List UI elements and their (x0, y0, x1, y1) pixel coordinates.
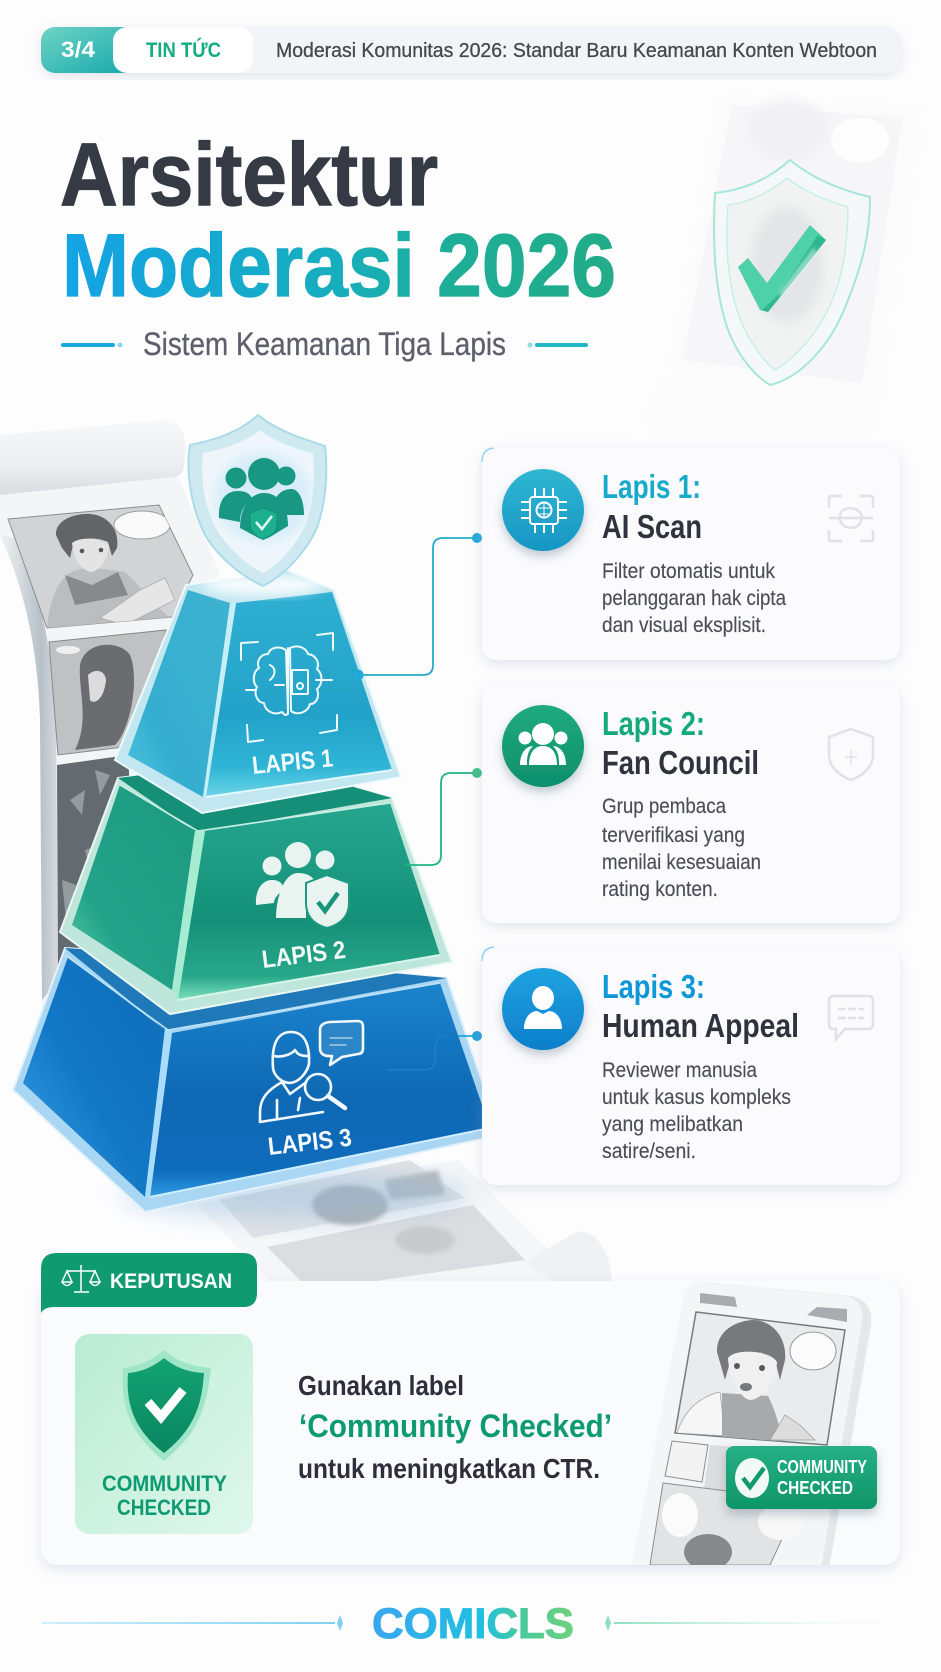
roll (0, 420, 185, 495)
card 1 description: Filter otomatis untuk (602, 560, 775, 583)
tab: keputusan: KEPUTUSAN (110, 1270, 232, 1293)
check mark (738, 225, 826, 312)
illustration: ghost comic strip with glass shield (640, 96, 925, 432)
community checked badge: CHECKED (777, 1478, 853, 1498)
connector: layer 3 to card 3 (458, 1031, 482, 1041)
card 2 description: terverifikasi yang (602, 824, 745, 847)
card: Lapis 2 Fan Council (482, 684, 900, 923)
icon: people with check badge (219, 458, 304, 540)
subtitle with rules: Sistem Keamanan Tiga Lapis (143, 326, 506, 362)
top news bar (41, 27, 900, 73)
icon: people (502, 705, 584, 787)
connector: layer 1 to card 1 (352, 533, 482, 680)
comic scroll behind pyramid (0, 420, 612, 1290)
community checked badge: COMMUNITY (777, 1457, 867, 1477)
bar headline: Moderasi Komunitas 2026: Standar Baru Keamanan Konten Webtoon (276, 40, 877, 62)
card 3 description: Reviewer manusia (602, 1059, 757, 1082)
verdict message: Gunakan label (298, 1370, 464, 1401)
layer 2: fan council (60, 760, 452, 1014)
footer brand (42, 1600, 900, 1648)
lower strip (197, 1160, 612, 1290)
layer 1 label: LAPIS 1 (251, 744, 334, 780)
card 2 name: Fan Council (602, 744, 759, 781)
card 2 description (602, 795, 761, 901)
page counter 3/4 (41, 27, 130, 73)
badge card: community checked (75, 1334, 253, 1534)
icon: chip (502, 469, 584, 551)
verdict message (298, 1370, 612, 1484)
logo: COMICLS (372, 1600, 574, 1648)
comic panel: boy (8, 505, 193, 628)
card 3 description: untuk kasus kompleks (602, 1086, 791, 1109)
icon: green shield (123, 1350, 211, 1461)
card 2 description: Grup pembaca (602, 795, 726, 818)
icon: person (502, 968, 584, 1050)
card 3 description: satire/seni. (602, 1140, 696, 1163)
heading (60, 124, 616, 362)
tab: keputusan (41, 1253, 257, 1313)
pyramid (13, 415, 500, 1219)
comic panel: girl (49, 630, 166, 755)
verdict panel (41, 1253, 900, 1575)
glass shield (714, 160, 870, 385)
card 3 heading: Lapis 3: (602, 968, 705, 1005)
card: Lapis 3 Human Appeal (482, 947, 900, 1185)
card 1 description: dan visual eksplisit. (602, 614, 766, 637)
category pill: TIN TỨC (146, 38, 221, 62)
card 2 heading: Lapis 2: (602, 705, 705, 742)
icon: ghost shield (829, 729, 873, 780)
icon: brain scan (241, 633, 337, 742)
badge card: community checked: COMMUNITY (102, 1471, 227, 1496)
icon: scales (62, 1265, 100, 1292)
layer 3: human appeal (13, 948, 500, 1212)
comic panel: dark action (57, 755, 130, 975)
card: Lapis 1 AI Scan (482, 448, 900, 660)
icon: ghost chat (829, 996, 873, 1039)
card 1 description: pelanggaran hak cipta (602, 587, 786, 610)
paper strip (0, 470, 240, 1010)
phone mockup with comic (630, 1282, 877, 1575)
title line 2: Moderasi 2026 (62, 215, 616, 315)
verdict message: ‘Community Checked’ (299, 1408, 612, 1444)
category pill (113, 27, 253, 73)
card 3 description: yang melibatkan (602, 1113, 743, 1136)
card 1 heading: Lapis 1: (602, 468, 701, 505)
card 1 name: AI Scan (602, 508, 702, 545)
comic screen (650, 1312, 845, 1570)
community checked badge (726, 1446, 877, 1509)
page counter 3/4: 3/4 (61, 37, 96, 62)
card 1 description (602, 560, 786, 637)
layer 1: AI scan (115, 570, 401, 813)
card 3 description (602, 1059, 791, 1163)
icon: council with shield (256, 842, 349, 928)
verdict message: untuk meningkatkan CTR. (298, 1453, 600, 1484)
glass shield with people (189, 415, 326, 595)
card 3 name: Human Appeal (602, 1007, 799, 1044)
layer 2 label: LAPIS 2 (260, 936, 347, 974)
layer 3 label: LAPIS 3 (267, 1124, 353, 1161)
card 2 description: rating konten. (602, 878, 718, 901)
connector: layer 2 to card 2 (405, 768, 482, 865)
badge card: community checked: CHECKED (117, 1495, 211, 1520)
title line 1: Arsitektur (60, 124, 438, 224)
icon: reviewer with magnifier (260, 1021, 363, 1122)
icon: ghost scan (829, 496, 873, 541)
card 2 description: menilai kesesuaian (602, 851, 761, 874)
